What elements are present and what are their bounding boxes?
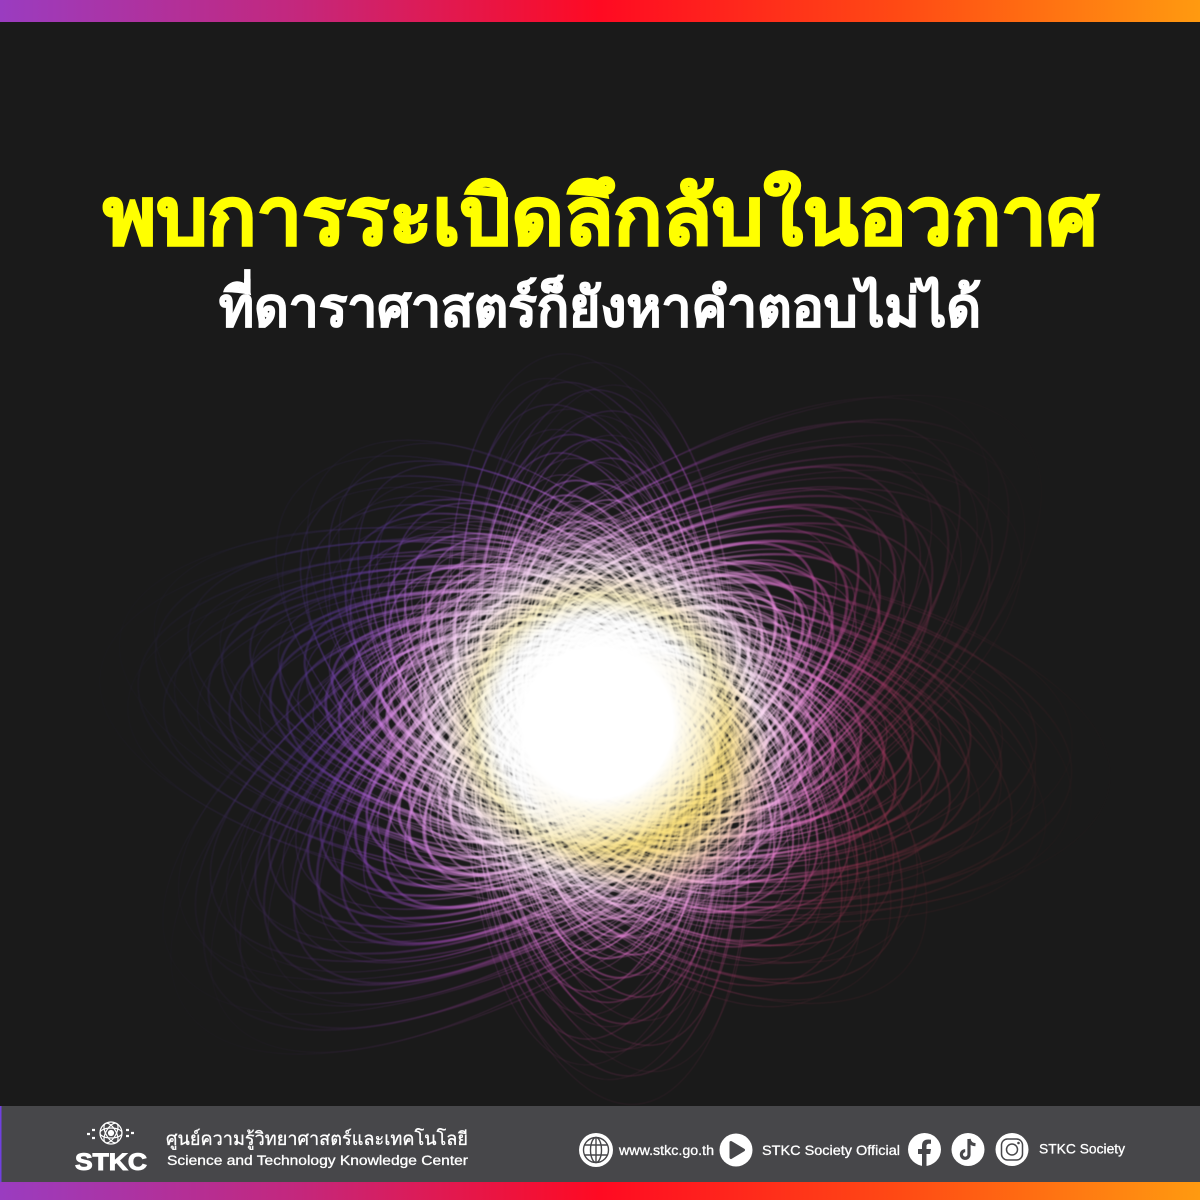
footer band (0, 1106, 1200, 1182)
logo mark (87, 1121, 134, 1145)
illustration: cosmic explosion of looping light trails (139, 355, 1048, 1104)
icon: instagram (996, 1133, 1028, 1166)
top gradient bar (0, 0, 1200, 22)
logo wordmark: STKC (75, 1149, 147, 1176)
social handle: STKC Society (1039, 1140, 1125, 1156)
organisation name Thai: ศูนย์ความรู้วิทยาศาสตร์และเทคโนโลยี (166, 1128, 468, 1150)
logo: STKC (75, 1121, 147, 1176)
title: พบการระเบิดลึกลับในอวกาศ (103, 170, 1099, 261)
channel name: STKC Society Official (762, 1142, 900, 1158)
subtitle: ที่ดาราศาสตร์ก็ยังหาคำตอบไม่ได้ (219, 269, 981, 338)
organisation name English: Science and Technology Knowledge Center (167, 1153, 469, 1168)
bright white core (473, 598, 723, 848)
website: www.stkc.go.th (618, 1143, 714, 1158)
icon: tiktok (952, 1133, 984, 1166)
icon: play (720, 1134, 752, 1166)
bottom gradient bar (0, 1182, 1200, 1200)
icon: facebook (908, 1133, 941, 1166)
light trail petals (139, 355, 1048, 1104)
icon: globe (579, 1133, 613, 1167)
